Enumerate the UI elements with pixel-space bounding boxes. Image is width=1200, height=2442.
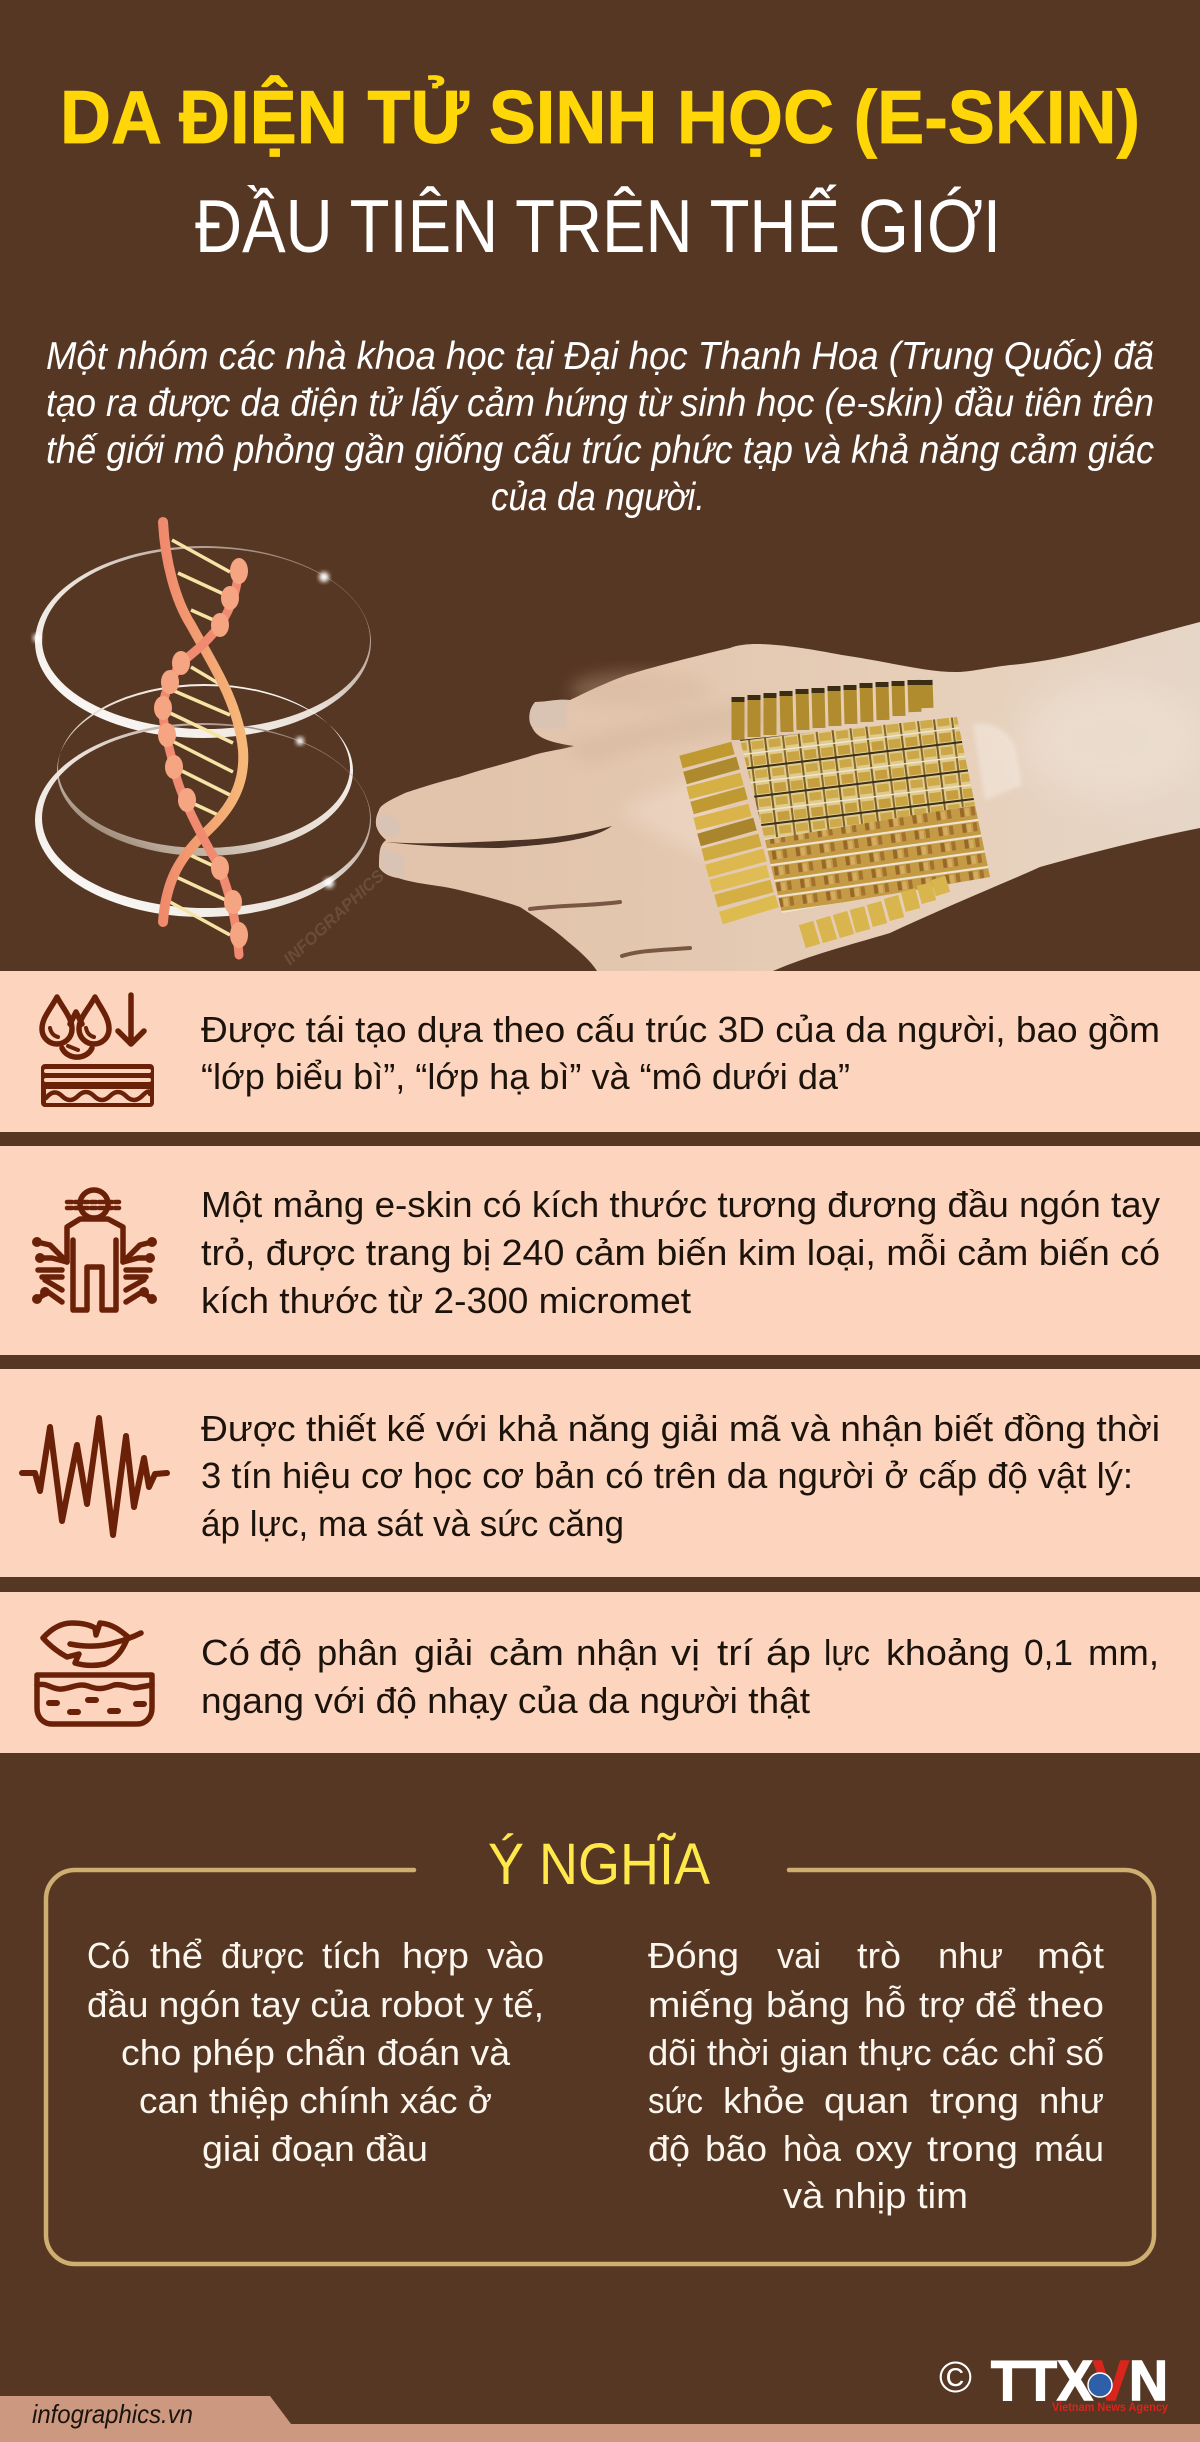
panel text: nhận (576, 1632, 658, 1673)
left column text: vào (487, 1935, 544, 1976)
right column text (648, 1935, 1104, 2216)
panel text: Được tái tạo dựa theo cấu trúc 3D của da người, bao gồm (201, 1009, 1160, 1050)
panel text: cảm (489, 1632, 564, 1673)
right column text: trợ (919, 1984, 965, 2025)
right column text: hòa (783, 2128, 842, 2169)
panel text: trỏ, được trang bị 240 cảm biến kim loại, mỗi cảm biến có (201, 1232, 1160, 1273)
e-skin bottom contact pads (806, 878, 943, 946)
right column text: vai (777, 1935, 821, 1976)
left column text (87, 1935, 544, 2169)
right column text: theo (1028, 1984, 1104, 2025)
e-skin left contact pads (681, 748, 777, 918)
left column text: hợp (402, 1935, 469, 1976)
panel text: vị (671, 1632, 700, 1673)
panel text: ngang với độ nhạy của da người thật (201, 1680, 810, 1721)
DNA strand two (163, 565, 239, 955)
panel: 3D skin structure (0, 971, 1200, 1132)
top strip dark tips (738, 680, 926, 702)
right column text: trọng (930, 2080, 1019, 2121)
panel text: Được thiết kế với khả năng giải mã và nhận biết đồng thời (201, 1408, 1160, 1449)
intro text block (46, 335, 1154, 519)
e-skin mesh lower (765, 805, 990, 913)
DNA rungs (170, 540, 233, 935)
right column text: hỗ (864, 1984, 906, 2025)
panel text: giải (414, 1632, 473, 1673)
panel text: phân (317, 1632, 398, 1673)
left column text: được (221, 1935, 304, 1976)
panel text: áp (766, 1632, 811, 1673)
hand silhouette (376, 622, 1200, 971)
panel: mechanical signals (0, 1369, 1200, 1577)
icon: feather on skin (37, 1623, 152, 1724)
thumb nail (530, 700, 570, 729)
right column text: bão (705, 2128, 767, 2169)
hand shading (560, 672, 1200, 860)
icon: drops over skin layers (42, 995, 152, 1105)
knuckle creases (530, 902, 690, 956)
right column text: miếng (648, 1984, 754, 2025)
left column text: tích (322, 1935, 381, 1976)
right column text: oxy (855, 2128, 912, 2169)
panel text: độ (259, 1632, 302, 1673)
footer band (0, 2396, 1200, 2442)
globe (1088, 2373, 1112, 2397)
tagline: Vietnam News Agency (1052, 2400, 1168, 2414)
right column text: trò (857, 1935, 901, 1976)
panel: pressure resolution (0, 1592, 1200, 1753)
intro text block: Một nhóm các nhà khoa học tại Đại học Thanh Hoa (Trung Quốc) đã (46, 335, 1154, 378)
right column text: và nhịp tim (783, 2175, 968, 2216)
right column text: băng (766, 1984, 850, 2025)
watermark: INFOGRAPHICS (280, 866, 389, 969)
illustration: hand with e-skin patch (280, 622, 1200, 971)
panel text: Có (201, 1632, 250, 1673)
right column text: như (1039, 2080, 1104, 2121)
panel text: lực (824, 1632, 870, 1673)
section heading: Ý NGHĨA (488, 1832, 710, 1897)
copyright mark: © (939, 2353, 972, 2402)
panel text: 3 tín hiệu cơ học cơ bản có trên da người ở cấp độ vật lý: (201, 1455, 1133, 1496)
title: DA ĐIỆN TỬ SINH HỌC (E-SKIN) (60, 75, 1140, 159)
e-skin mesh upper (740, 717, 975, 840)
panel text: Một mảng e-skin có kích thước tương đương đầu ngón tay (201, 1184, 1160, 1225)
panel text: trí (717, 1632, 753, 1673)
panel text (201, 1184, 1160, 1321)
right column text: sức (648, 2080, 703, 2121)
finger crease (386, 826, 612, 848)
footer website: infographics.vn (32, 2399, 193, 2429)
panel: sensor array (0, 1146, 1200, 1355)
illustration: DNA helix (154, 522, 248, 955)
right column text: dõi thời gian thực các chỉ số (648, 2032, 1104, 2073)
title (60, 75, 1140, 268)
right column text: để (975, 1984, 1017, 2025)
icon: person with circuits (32, 1190, 157, 1310)
illustration: rings behind DNA (33, 546, 371, 917)
left column text: thể (150, 1935, 203, 1976)
DNA beads (154, 558, 248, 948)
left column text: Có (87, 1935, 130, 1976)
right column text: như (938, 1935, 1003, 1976)
translucent film edge (973, 724, 1022, 800)
DNA strand one (163, 522, 243, 922)
left column text: đầu ngón tay của robot y tế, (87, 1984, 544, 2025)
left column text: can thiệp chính xác ở (139, 2080, 492, 2121)
right column text: độ (648, 2128, 690, 2169)
finger nails (376, 812, 405, 877)
right column text: máu (1034, 2128, 1104, 2169)
left column text: giai đoạn đầu (202, 2128, 428, 2169)
section frame (46, 1870, 1154, 2264)
right column text: một (1037, 1935, 1104, 1976)
section: significance (46, 1832, 1154, 2264)
panel text: áp lực, ma sát và sức căng (201, 1503, 624, 1544)
title: ĐẦU TIÊN TRÊN THẾ GIỚI (195, 184, 1001, 268)
panel text (201, 1632, 1159, 1721)
right column text: quan (824, 2080, 909, 2121)
logo: TTXVN (939, 2349, 1168, 2414)
panel text: kích thước từ 2-300 micromet (201, 1280, 691, 1321)
panel text: mm, (1088, 1632, 1159, 1673)
icon: signal waveform (22, 1418, 167, 1535)
panel text (201, 1009, 1160, 1097)
wordmark: TTXVN (991, 2349, 1168, 2413)
right column text: Đóng (648, 1935, 739, 1976)
right column text: trong (927, 2128, 1018, 2169)
panel text: 0,1 (1024, 1632, 1073, 1673)
panel text (201, 1408, 1160, 1544)
left column text: cho phép chẩn đoán và (121, 2032, 511, 2073)
panel text: “lớp biểu bì”, “lớp hạ bì” và “mô dưới da” (201, 1056, 850, 1097)
panel text: khoảng (886, 1632, 1010, 1673)
intro text block: của da người. (491, 476, 705, 519)
right column text: khỏe (723, 2080, 805, 2121)
e-skin top contact strips (738, 680, 927, 740)
